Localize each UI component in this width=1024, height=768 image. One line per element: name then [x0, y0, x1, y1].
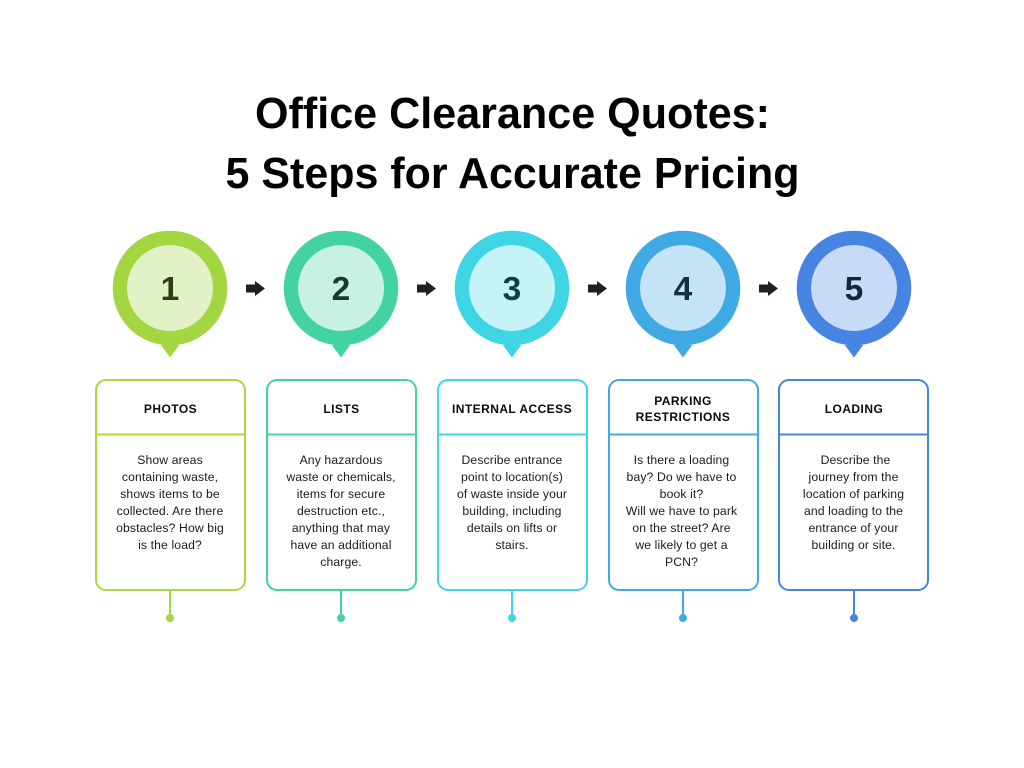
panel: internal access card: of waste inside your [457, 487, 567, 501]
connector dot 2 [337, 590, 345, 622]
panel: loading card: journey from the [808, 470, 899, 484]
icon: number pin 2: 2 [332, 271, 350, 308]
panel: lists card: anything that may [292, 521, 391, 535]
panel: parking restrictions card: PCN? [665, 555, 698, 569]
panel: photos card: Show areas [137, 453, 203, 467]
panel: loading card: LOADING [825, 402, 883, 416]
icon: number pin 1 [113, 231, 227, 358]
panel: photos card: collected. Are there [117, 504, 223, 518]
panel: lists card: destruction etc., [297, 504, 385, 518]
icon: number pin 3 [455, 231, 569, 358]
panel: parking restrictions card: on the street? Are [632, 521, 731, 535]
panel: internal access card: stairs. [495, 538, 529, 552]
icon: number pin 5 [797, 231, 911, 358]
title [226, 90, 800, 198]
step 4: parking restrictions [608, 231, 759, 622]
panel: internal access card: details on lifts or [467, 521, 557, 535]
panel: loading card: and loading to the [804, 504, 903, 518]
panel: parking restrictions card: Is there a loading [634, 453, 729, 467]
panel: parking restrictions card: book it? [660, 487, 703, 501]
step 1: photos [95, 231, 246, 622]
arrow 2 [417, 281, 436, 296]
panel: photos card: PHOTOS [144, 402, 197, 416]
arrow 1 [246, 281, 265, 296]
connector dot 1 [166, 590, 174, 622]
panel: photos card [95, 380, 246, 590]
panel: lists card: have an additional [290, 538, 392, 552]
step 5: loading [778, 231, 929, 622]
icon: number pin 3: 3 [503, 271, 521, 308]
panel: parking restrictions card: we likely to get a [634, 538, 728, 552]
icon: number pin 1: 1 [161, 271, 179, 308]
panel: internal access card: building, including [462, 504, 562, 518]
title: Office Clearance Quotes: [255, 90, 770, 138]
panel: loading card: entrance of your [808, 521, 898, 535]
panel: lists card [266, 380, 417, 590]
connector dot 4 [679, 590, 687, 622]
title: 5 Steps for Accurate Pricing [226, 150, 800, 198]
panel: internal access card: Describe entrance [462, 453, 563, 467]
arrow 4 [759, 281, 778, 296]
icon: number pin 4: 4 [674, 271, 693, 308]
panel: lists card: waste or chemicals, [285, 470, 396, 484]
panel: parking restrictions card: bay? Do we have to [627, 470, 737, 484]
connector dot 5 [850, 590, 858, 622]
panel: parking restrictions card: PARKING [654, 394, 712, 408]
panel: loading card [778, 380, 929, 590]
icon: number pin 5: 5 [845, 271, 863, 308]
connector dot 3 [508, 590, 516, 622]
panel: lists card: charge. [320, 555, 362, 569]
step 3: internal access [437, 231, 588, 622]
panel: lists card: Any hazardous [300, 453, 382, 467]
panel: internal access card [437, 380, 588, 590]
panel: lists card: items for secure [297, 487, 385, 501]
panel: parking restrictions card [608, 380, 759, 590]
panel: loading card: location of parking [803, 487, 904, 501]
icon: number pin 2 [284, 231, 398, 358]
panel: photos card: is the load? [138, 538, 202, 552]
panel: parking restrictions card: RESTRICTIONS [636, 410, 730, 424]
panel: internal access card: INTERNAL ACCESS [452, 402, 572, 416]
panel: photos card: shows items to be [120, 487, 220, 501]
panel: photos card: obstacles? How big [116, 521, 224, 535]
arrow 3 [588, 281, 607, 296]
step 2: lists [266, 231, 417, 622]
panel: loading card: Describe the [821, 453, 891, 467]
panel: lists card: LISTS [323, 402, 360, 416]
panel: loading card: building or site. [811, 538, 896, 552]
panel: parking restrictions card: Will we have to park [626, 504, 738, 518]
icon: number pin 4 [626, 231, 740, 358]
panel: photos card: containing waste, [122, 470, 218, 484]
panel: internal access card: point to location(s) [461, 470, 563, 484]
